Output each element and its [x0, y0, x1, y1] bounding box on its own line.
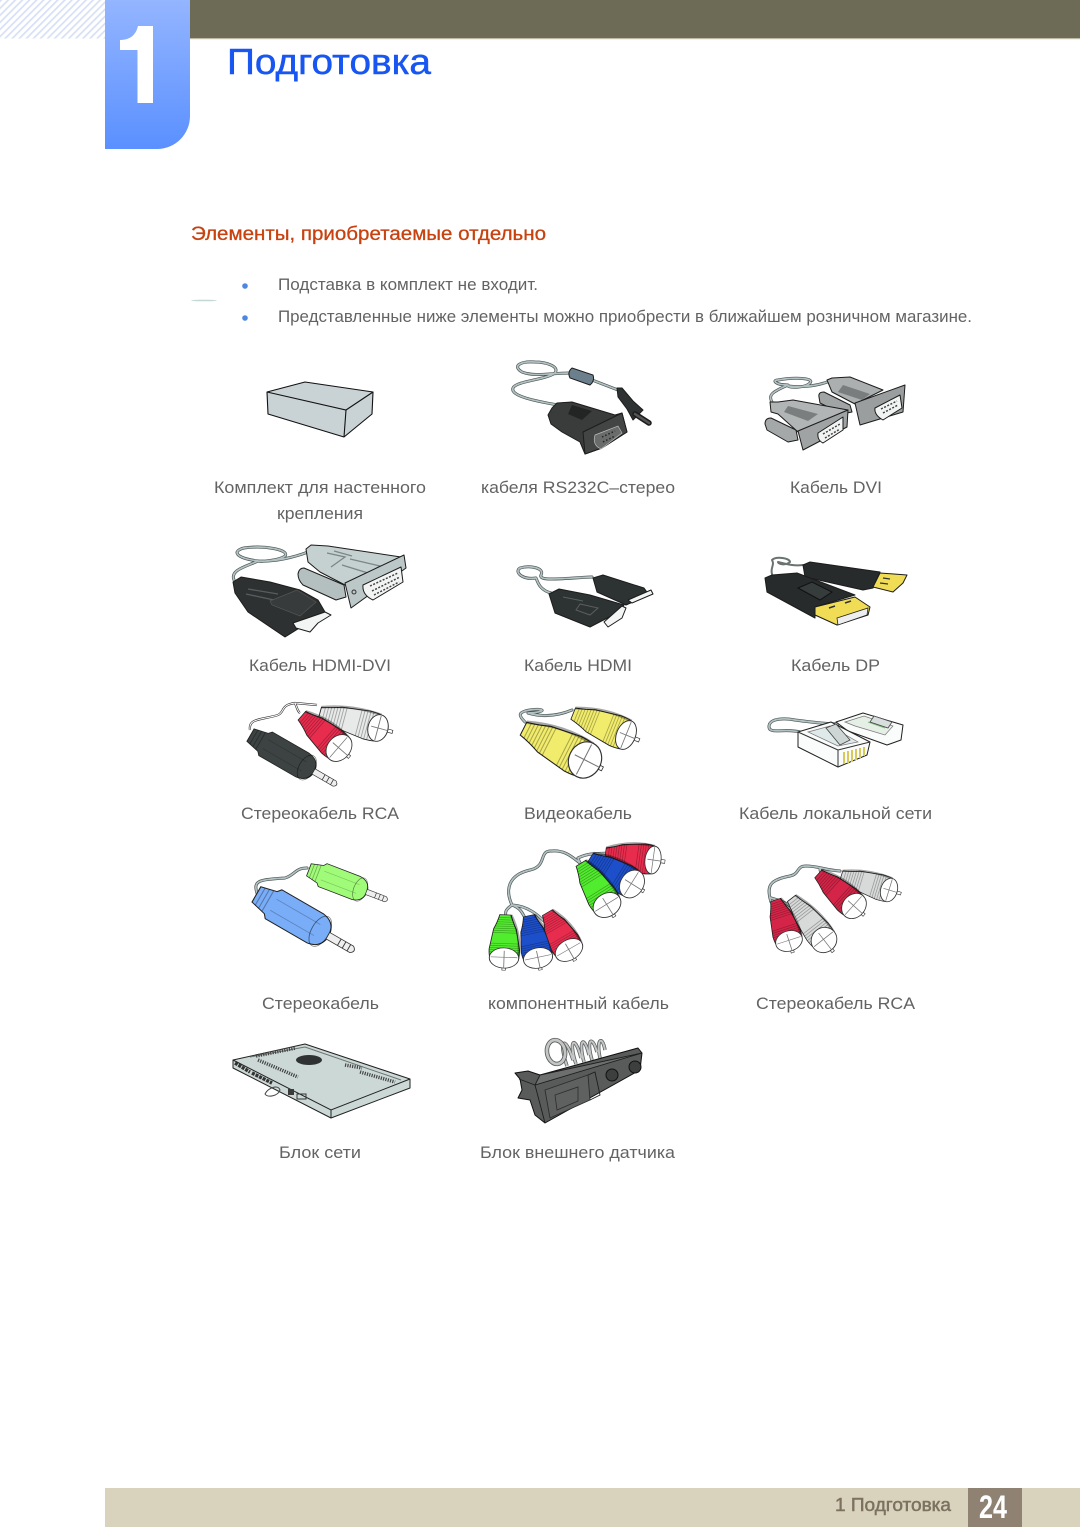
label: stereo RCA cable: Стереокабель RCA: [756, 994, 916, 1013]
icon: LAN cable: [769, 713, 903, 767]
bullet list: [242, 275, 972, 326]
label: stereo cable: Стереокабель: [262, 994, 379, 1013]
label: DVI cable: Кабель DVI: [790, 478, 882, 497]
label: external sensor unit: Блок внешнего датчика: [480, 1143, 676, 1162]
chapter number tab: [105, 0, 190, 149]
note artifact: [191, 300, 217, 301]
label: wall mount kit: [214, 478, 426, 523]
icon: external sensor unit: [515, 1039, 642, 1123]
label: network box: Блок сети: [279, 1143, 361, 1162]
hatched corner band: [0, 0, 105, 38]
icon: stereo RCA cable with black jack: [244, 699, 396, 797]
header bar: [190, 0, 1080, 39]
chapter number tab: 1: [118, 5, 178, 126]
label: LAN cable: Кабель локальной сети: [739, 804, 932, 823]
label: DP cable: Кабель DP: [791, 656, 880, 675]
bullet list: Представленные ниже элементы можно приобрести в ближайшем розничном магазине.: [278, 307, 972, 326]
label: HDMI-DVI cable: Кабель HDMI-DVI: [249, 656, 391, 675]
bullet list: Подставка в комплект не входит.: [278, 275, 538, 294]
icon: RS232C stereo cable: [513, 362, 649, 454]
icon: DVI cable: [765, 377, 905, 450]
icon: video cable: [515, 699, 645, 786]
footer chapter label: 1 Подготовка: [835, 1495, 952, 1515]
icon: HDMI cable: [518, 567, 653, 627]
label: wall mount kit: крепления: [277, 504, 363, 523]
section heading: Элементы, приобретаемые отдельно: [191, 224, 546, 245]
label: stereo RCA cable: Стереокабель RCA: [241, 804, 400, 823]
page number box: 24: [979, 1489, 1007, 1525]
chapter title: Подготовка: [227, 41, 432, 82]
label: RS232C stereo cable: кабеля RS232C–стерео: [481, 478, 675, 497]
label: wall mount kit: Комплект для настенного: [214, 478, 426, 497]
icon: stereo cable green and blue: [248, 858, 392, 965]
page number box: [968, 1488, 1022, 1527]
icon: stereo RCA cable red and white: [762, 863, 905, 960]
icon: HDMI-DVI cable: [233, 545, 406, 637]
label: HDMI cable: Кабель HDMI: [524, 656, 632, 675]
icon: component cable: [488, 839, 667, 973]
icon: network box: [233, 1044, 410, 1118]
label: video cable: Видеокабель: [524, 804, 632, 823]
icon: DP cable: [765, 558, 907, 625]
icon: wall mount kit box: [267, 382, 373, 437]
label: component cable: компонентный кабель: [488, 994, 669, 1013]
footer band: [105, 1488, 1080, 1527]
